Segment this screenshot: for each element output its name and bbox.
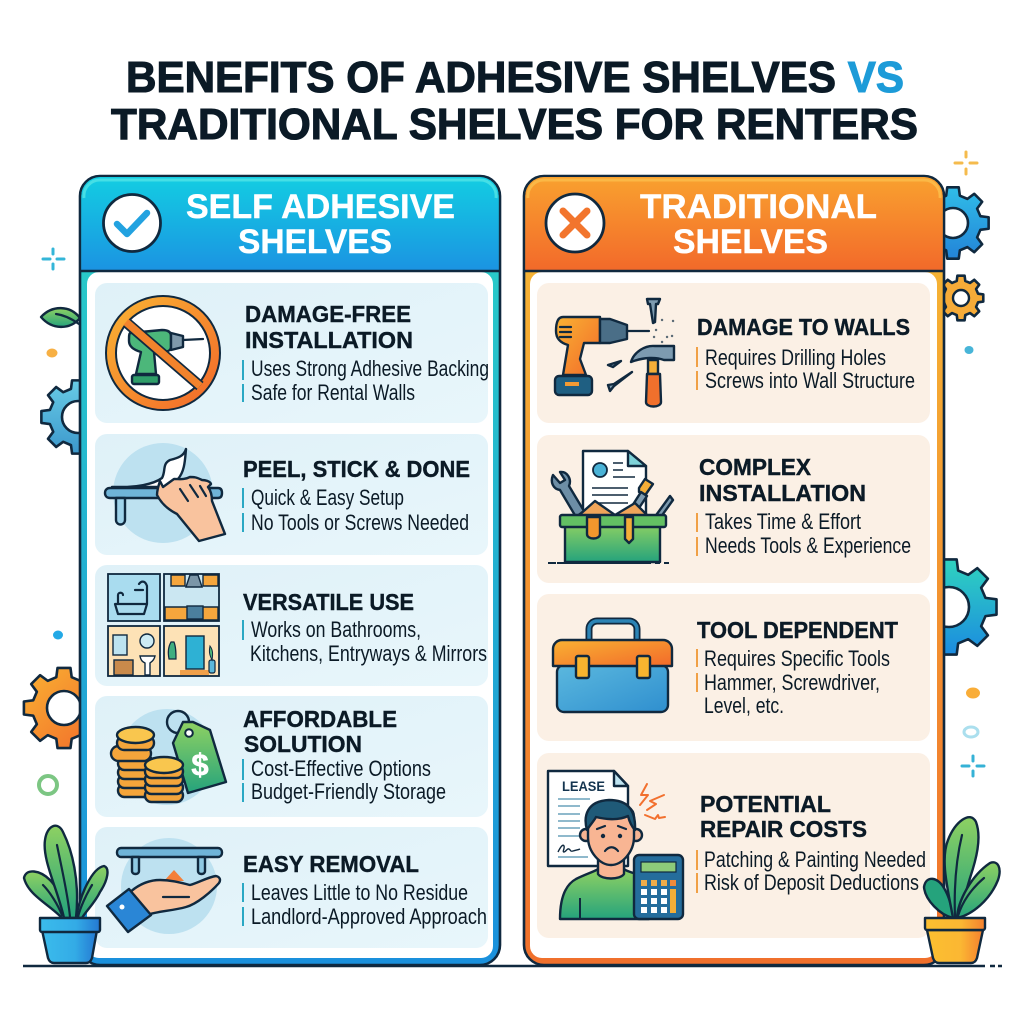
- drill: [555, 317, 649, 395]
- panel heading: SELF ADHESIVE: [186, 188, 455, 226]
- card: affordable solution: [95, 696, 488, 817]
- lease document: LEASE: [562, 778, 605, 794]
- text: bullets: Risk of Deposit Deductions: [704, 870, 919, 895]
- text: bullets: Needs Tools & Experience: [705, 533, 911, 558]
- ground line: [23, 965, 1002, 967]
- room: vanity: [108, 626, 160, 676]
- icon: four rooms: [108, 574, 219, 676]
- icon: toolbox: [553, 621, 672, 712]
- title: TRADITIONAL SHELVES FOR RENTERS: [111, 100, 918, 149]
- text: bullets: Landlord-Approved Approach: [251, 904, 487, 929]
- decoration: sparkles and dots: [39, 152, 984, 794]
- text: heading: INSTALLATION: [245, 327, 413, 353]
- text: heading: [700, 791, 867, 842]
- text: bullets: Uses Strong Adhesive Backing: [251, 356, 489, 381]
- text: heading: DAMAGE TO WALLS: [697, 314, 910, 340]
- text: bullets: [243, 485, 469, 535]
- text: bullets: [697, 345, 915, 393]
- decoration: leaf left: [41, 308, 80, 327]
- lease document: [548, 771, 628, 866]
- text: bullets: Safe for Rental Walls: [251, 380, 415, 405]
- wrench: [552, 472, 584, 517]
- panel heading: TRADITIONAL: [640, 188, 877, 226]
- text: heading: COMPLEX: [699, 454, 811, 480]
- icon: peeling shelf: [105, 443, 225, 543]
- decoration: teal gear right: [901, 559, 997, 655]
- text: bullets: Cost-Effective Options: [251, 756, 431, 781]
- text: bullets: [243, 756, 446, 804]
- debris dots: [654, 320, 673, 342]
- card: complex installation: [537, 435, 930, 583]
- text: heading: INSTALLATION: [699, 480, 866, 506]
- text: bullets: [243, 880, 487, 929]
- panel heading: [640, 188, 877, 261]
- room: bathroom: [108, 574, 160, 621]
- card: damage-free installation: [95, 283, 489, 423]
- text: heading: AFFORDABLE: [243, 706, 397, 732]
- text: bullets: [697, 646, 890, 718]
- text: heading: DAMAGE-FREE: [245, 301, 411, 327]
- text: bullets: Requires Drilling Holes: [705, 345, 886, 370]
- text: bullets: Leaves Little to No Residue: [251, 880, 468, 905]
- icon: worried renter with lease and calculator: [548, 771, 683, 919]
- text: heading: [243, 706, 397, 757]
- text: heading: TOOL DEPENDENT: [697, 617, 899, 643]
- panel: traditional shelves: [524, 176, 944, 965]
- text: bullets: [243, 617, 487, 666]
- screwdriver: [625, 479, 673, 521]
- decoration: blue gear right top: [917, 187, 989, 259]
- text: heading: REPAIR COSTS: [700, 816, 867, 842]
- title: BENEFITS OF ADHESIVE SHELVES VS: [126, 53, 904, 102]
- text: bullets: Requires Specific Tools: [704, 646, 890, 671]
- decoration: plant left: [24, 826, 107, 963]
- text: heading: VERSATILE USE: [243, 589, 414, 615]
- text: bullets: No Tools or Screws Needed: [251, 510, 469, 535]
- card: potential repair costs: [537, 753, 930, 938]
- card: easy removal: [95, 827, 488, 948]
- card: tool dependent: [537, 594, 930, 741]
- panel interior: [530, 272, 937, 958]
- text: bullets: Budget-Friendly Storage: [251, 779, 446, 804]
- room: kitchen: [164, 574, 219, 621]
- coin stacks: [111, 727, 183, 802]
- card: peel stick and done: [95, 434, 488, 555]
- text: heading: EASY REMOVAL: [243, 851, 419, 877]
- toolbox: [560, 501, 666, 562]
- icon: no drill: [111, 301, 215, 405]
- panel heading: SHELVES: [238, 223, 392, 261]
- panel frame: [80, 176, 500, 965]
- icon: coins and price tag: [111, 709, 226, 805]
- text: bullets: Level, etc.: [704, 693, 784, 718]
- text: bullets: Works on Bathrooms,: [251, 617, 421, 642]
- icon: check mark: [104, 194, 160, 252]
- icon: hand lifting shelf: [107, 838, 222, 934]
- icon: cross mark: [546, 194, 604, 252]
- panel heading: SHELVES: [673, 223, 828, 261]
- text: heading: [699, 454, 866, 506]
- decoration: blue gear left: [41, 380, 115, 454]
- text: bullets: Hammer, Screwdriver,: [704, 670, 880, 695]
- card: damage to walls: [537, 283, 930, 423]
- text: heading: POTENTIAL: [700, 791, 831, 817]
- calculator: [634, 855, 683, 919]
- panel frame: [524, 176, 944, 965]
- panel header: [81, 177, 499, 271]
- text: heading: SOLUTION: [244, 731, 362, 757]
- icon: toolbox with plans: [548, 451, 673, 563]
- person: [560, 800, 649, 919]
- text: bullets: Screws into Wall Structure: [705, 368, 915, 393]
- decoration: small orange gear right: [939, 276, 983, 320]
- plans paper: [583, 451, 646, 521]
- text: bullets: Patching & Painting Needed: [704, 847, 926, 872]
- room: entryway: [164, 626, 219, 676]
- text: bullets: Takes Time & Effort: [705, 509, 861, 534]
- text: bullets: Kitchens, Entryways & Mirrors: [250, 641, 487, 666]
- icon: drill hammer screws: [555, 299, 674, 406]
- lightning bolts: [640, 784, 665, 819]
- text: bullets: [697, 847, 926, 895]
- title: [111, 53, 918, 149]
- price tag: $: [191, 747, 209, 782]
- decoration: plant right: [924, 817, 1000, 963]
- panel: self adhesive shelves: [80, 176, 500, 965]
- small screws: [608, 361, 632, 391]
- text: bullets: Quick & Easy Setup: [251, 485, 404, 510]
- decoration: orange gear left: [24, 668, 104, 748]
- panel heading: [186, 188, 455, 261]
- text: bullets: [243, 356, 489, 405]
- panel header: [525, 177, 943, 271]
- panel interior: [87, 272, 493, 958]
- text: bullets: [697, 509, 911, 558]
- hammer: [631, 346, 674, 406]
- card: versatile use: [95, 565, 488, 686]
- text: heading: [245, 301, 413, 353]
- text: heading: PEEL, STICK & DONE: [243, 456, 470, 482]
- screw: [647, 299, 660, 323]
